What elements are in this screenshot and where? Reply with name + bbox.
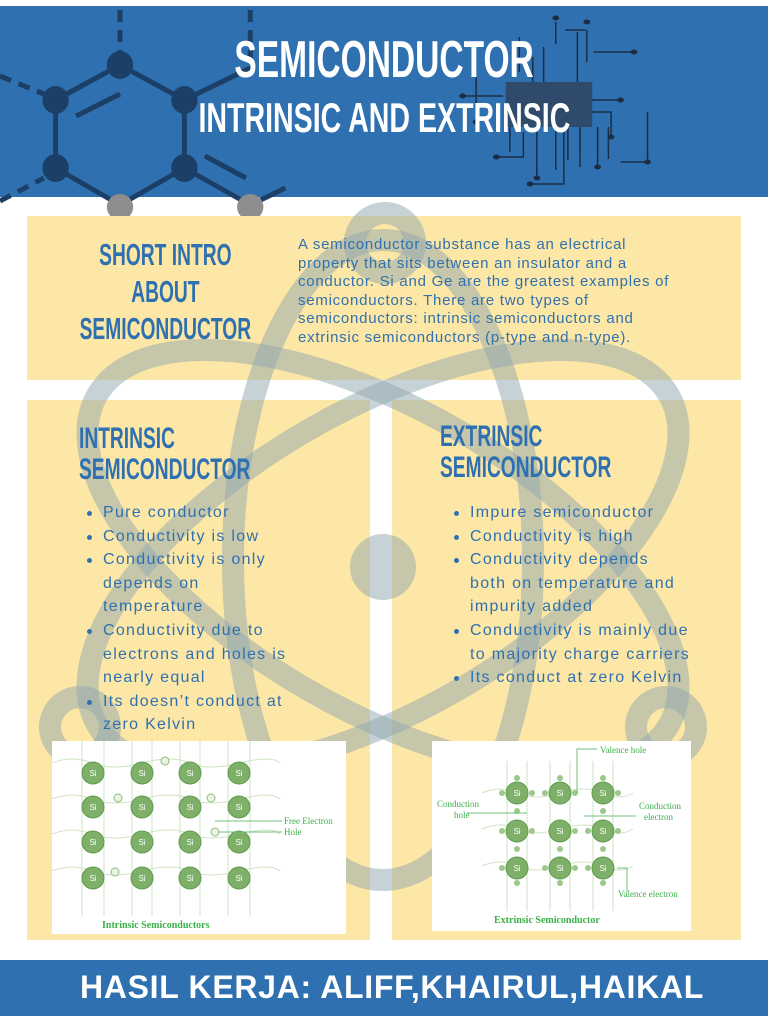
diagram: extrinsic lattice: Si (599, 827, 607, 836)
heading: short intro: ABOUT (131, 274, 199, 309)
heading: intrinsic: SEMICONDUCTOR (79, 453, 250, 486)
diagram: intrinsic lattice: Si (89, 838, 97, 847)
list: intrinsic: Its doesn’t conduct at zero Kelvin (103, 693, 283, 733)
diagram: intrinsic lattice: Si (89, 769, 97, 778)
diagram: extrinsic lattice: Si (599, 864, 607, 873)
list: extrinsic: Its conduct at zero Kelvin (470, 669, 683, 686)
diagram: intrinsic lattice: Si (186, 874, 194, 883)
list: extrinsic: Conductivity is high (470, 528, 634, 545)
heading: short intro: SHORT INTRO (99, 237, 231, 272)
footer band: HASIL KERJA: ALIFF,KHAIRUL,HAIKAL (80, 969, 704, 1005)
list: intrinsic (87, 504, 286, 733)
diagram: intrinsic lattice: Si (235, 874, 243, 883)
footer band (0, 960, 768, 1016)
diagram: intrinsic lattice: Si (138, 803, 146, 812)
list: extrinsic: both on temperature and impurity added (470, 575, 675, 615)
heading: short intro (79, 237, 251, 346)
list: intrinsic: Conductivity is only depends on temperature (103, 551, 266, 615)
diagram: intrinsic lattice: Si (235, 838, 243, 847)
heading: extrinsic: SEMICONDUCTOR (440, 451, 611, 484)
text: intro paragraph: A semiconductor substance has an electrical property that sits between an insulator and a conductor. Si and Ge are the greatest examples of semiconductors. There are two types of semiconductors: intrinsic semiconductors and extrinsic semiconductors (p-type and n-type). (298, 236, 669, 346)
list: intrinsic: Conductivity due to electrons and holes is nearly equal (103, 622, 286, 686)
icon: molecule (0, 10, 286, 216)
diagram: extrinsic lattice: Extrinsic Semiconductor (494, 915, 600, 926)
heading: extrinsic: EXTRINSIC (440, 420, 542, 453)
diagram: extrinsic lattice: Si (556, 789, 564, 798)
diagram: intrinsic lattice: Si (186, 769, 194, 778)
diagram: extrinsic lattice: Si (513, 789, 521, 798)
diagram: extrinsic lattice: Valence hole (600, 745, 646, 755)
diagram: extrinsic lattice: electron (644, 812, 673, 822)
diagram: intrinsic lattice: Intrinsic Semiconductors (102, 920, 210, 931)
diagram: intrinsic lattice: Si (235, 803, 243, 812)
diagram: intrinsic lattice: Si (89, 803, 97, 812)
diagram: intrinsic lattice: Si (138, 838, 146, 847)
panel: intro (27, 216, 741, 380)
diagram: intrinsic lattice: Si (235, 769, 243, 778)
heading: extrinsic (440, 420, 611, 484)
diagram: extrinsic lattice: hole (454, 810, 470, 820)
diagram: extrinsic lattice: Conduction (639, 801, 681, 811)
diagram: intrinsic lattice (52, 741, 346, 934)
diagram: intrinsic lattice: Si (138, 769, 146, 778)
list: extrinsic: Conductivity is mainly due to majority charge carriers (470, 622, 690, 663)
list: extrinsic (454, 504, 690, 686)
panel: intrinsic (27, 400, 370, 940)
diagram: extrinsic lattice: Si (513, 864, 521, 873)
subtitle: INTRINSIC AND EXTRINSIC (198, 94, 570, 141)
diagram: intrinsic lattice: Free Electron (284, 816, 333, 826)
diagram: extrinsic lattice (432, 741, 691, 931)
list: intrinsic: Conductivity is low (103, 528, 259, 545)
diagram: extrinsic lattice: Si (556, 827, 564, 836)
list: intrinsic: Pure conductor (103, 504, 230, 521)
heading: intrinsic: INTRINSIC (79, 422, 175, 455)
icon: chip (459, 16, 651, 186)
diagram: intrinsic lattice: Hole (284, 827, 302, 837)
list: extrinsic: Conductivity depends (470, 551, 649, 568)
panel: extrinsic (392, 400, 741, 940)
diagram: extrinsic lattice: Si (513, 827, 521, 836)
diagram: intrinsic lattice: Si (186, 838, 194, 847)
diagram: intrinsic lattice: Si (186, 803, 194, 812)
diagram: intrinsic lattice: Si (138, 874, 146, 883)
diagram: extrinsic lattice: Conduction (437, 799, 479, 809)
heading: intrinsic (79, 422, 250, 486)
diagram: extrinsic lattice: Si (556, 864, 564, 873)
list: extrinsic: Impure semiconductor (470, 504, 654, 521)
diagram: extrinsic lattice: Valence electron (618, 889, 678, 899)
diagram: extrinsic lattice: Si (599, 789, 607, 798)
diagram: intrinsic lattice: Si (89, 874, 97, 883)
header band (0, 6, 768, 197)
heading: short intro: SEMICONDUCTOR (79, 311, 251, 346)
title: SEMICONDUCTOR (234, 31, 534, 89)
